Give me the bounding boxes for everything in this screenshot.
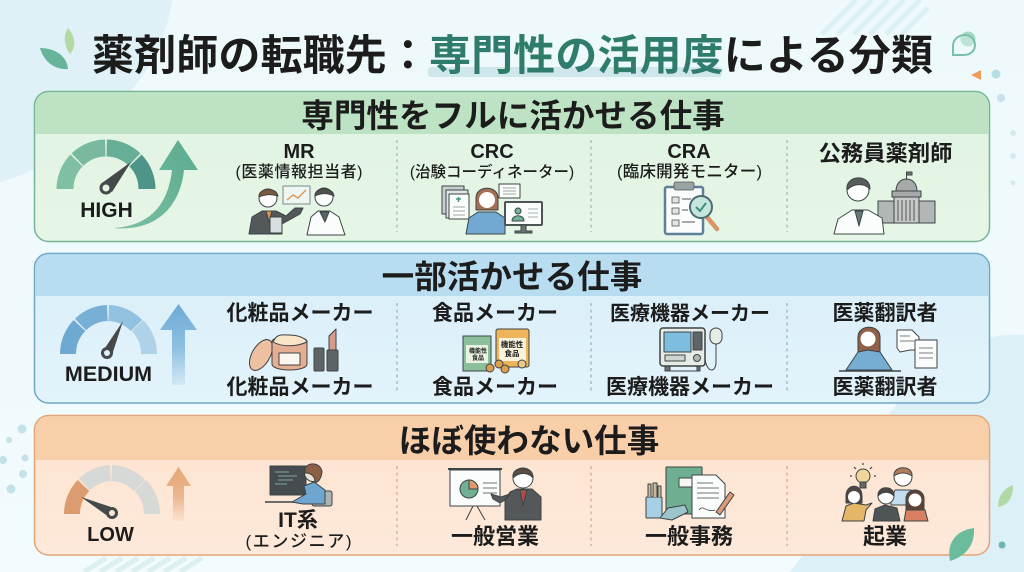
job: CRA (617, 141, 762, 234)
icon: supplement packets: 食品 (504, 348, 520, 358)
job: food maker: 食品メーカー (432, 376, 558, 399)
icon: supplement packets: 食品 (472, 354, 484, 362)
icon: MR and doctor (249, 186, 345, 235)
panel: hardly used (34, 416, 990, 555)
heading: 専門性をフルに活かせる仕事 (301, 97, 725, 134)
job: general sales: 一般営業 (451, 524, 539, 549)
divider (397, 303, 787, 394)
job: IT engineer: (エンジニア) (246, 532, 352, 551)
job: cosmetics maker: 化粧品メーカー (226, 302, 374, 325)
job: CRA: (臨床開発モニター) (617, 162, 762, 181)
job: IT engineer: IT系 (278, 509, 318, 532)
title: 薬剤師の転職先：専門性の活用度による分類 (92, 32, 933, 79)
decoration: top-left leaves (40, 28, 74, 69)
job: medical device maker: 医療機器メーカー (606, 376, 774, 399)
job: general office work: 一般事務 (645, 524, 733, 549)
icon: public servant and government building (834, 172, 935, 234)
decoration: top-right shapes and dots (953, 32, 1016, 186)
panel: full use of expertise (34, 92, 990, 242)
low gauge: LOW (87, 524, 134, 546)
high gauge (65, 148, 147, 222)
heading: 一部活かせる仕事 (382, 258, 642, 295)
job: MR: MR (283, 141, 315, 163)
icon: stationery and documents (646, 467, 734, 520)
job: medical device maker: 医療機器メーカー (610, 302, 770, 325)
heading: ほぼ使わない仕事 (399, 422, 659, 459)
icon: supplement packets: 機能性 (501, 339, 524, 349)
job: CRA: CRA (667, 141, 711, 163)
job: medical translator: 医薬翻訳者 (832, 376, 938, 399)
job: CRC (410, 141, 574, 234)
divider (397, 140, 787, 232)
decoration: left dots (0, 424, 28, 494)
job: MR (236, 141, 362, 235)
job: medical device maker (606, 302, 774, 399)
job: IT engineer (246, 464, 352, 551)
panel background (34, 416, 990, 555)
job: medical translator: 医薬翻訳者 (832, 302, 938, 325)
job: CRC: CRC (470, 141, 514, 163)
high gauge: HIGH (80, 199, 133, 222)
icon: clipboard and magnifier (665, 182, 717, 234)
job: entrepreneurship (842, 463, 928, 549)
job: CRC: (治験コーディネーター) (410, 162, 574, 181)
panel: partly usable (34, 254, 990, 403)
job: public servant pharmacist (819, 141, 952, 234)
icon: medical device (660, 328, 722, 371)
job: medical translator (832, 302, 938, 399)
icon: team with lightbulb (842, 463, 928, 521)
job: cosmetics maker: 化粧品メーカー (226, 376, 374, 399)
low gauge (72, 473, 152, 546)
panel background (34, 254, 990, 403)
arrow: blue up (160, 304, 197, 385)
panel background (34, 92, 990, 242)
icon: supplement packets: 機能性 (469, 347, 487, 355)
job: entrepreneurship: 起業 (863, 524, 907, 549)
job: general office work (645, 467, 734, 549)
icon: CRC nurse (442, 184, 542, 234)
job: general sales (448, 468, 541, 549)
arrow: orange up (166, 467, 191, 521)
job: food maker: 食品メーカー (432, 302, 558, 325)
icon: supplement packets (463, 329, 529, 373)
icon: translator writing (839, 327, 937, 371)
decoration: bottom-right leaves (949, 485, 1013, 561)
icon: engineer at monitor (265, 464, 332, 506)
job: MR: (医薬情報担当者) (236, 163, 362, 181)
job: public servant pharmacist: 公務員薬剤師 (819, 141, 952, 166)
icon: sales presentation (448, 468, 541, 520)
job: food maker (432, 302, 558, 399)
arrow: rising green (113, 140, 198, 228)
divider (397, 466, 787, 546)
medium gauge: MEDIUM (65, 362, 152, 386)
job: cosmetics maker (226, 302, 374, 399)
icon: cream jar and lipstick (245, 329, 338, 374)
medium gauge (65, 313, 152, 386)
